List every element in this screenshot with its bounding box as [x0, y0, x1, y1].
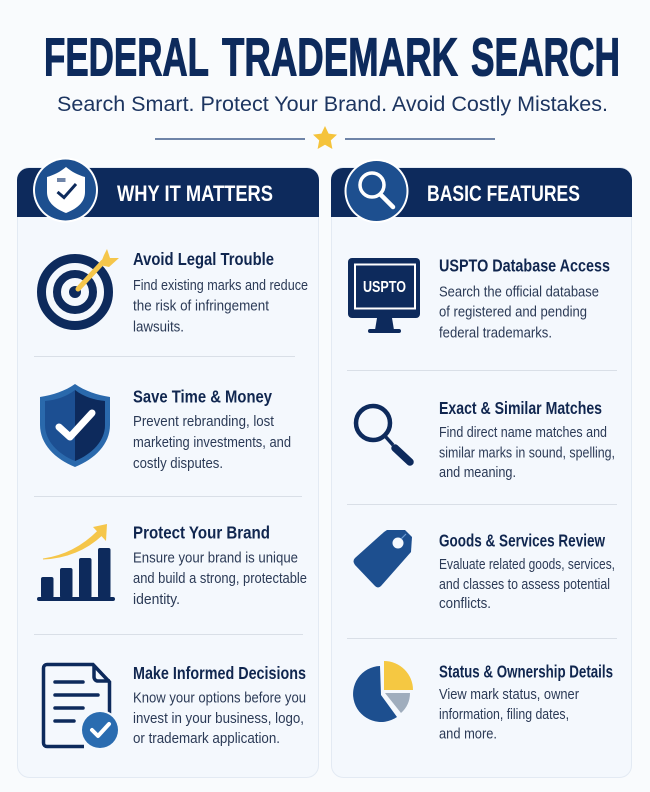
title: FEDERAL: [44, 28, 209, 88]
item: save time and money: [40, 384, 291, 472]
description: Search the official database: [439, 284, 599, 300]
description: and meaning.: [439, 464, 516, 481]
heading: Save Time & Money: [133, 386, 272, 406]
item: status and ownership details: [353, 661, 613, 742]
heading: Avoid Legal Trouble: [133, 249, 274, 269]
icon: monitor: USPTO: [363, 279, 406, 296]
description: [439, 284, 599, 342]
description: information, filing dates,: [439, 706, 569, 723]
icon: pie chart: [353, 661, 413, 722]
description: and classes to assess potential: [439, 576, 610, 593]
item: uspto database access: [348, 256, 610, 342]
description: Know your options before you: [133, 690, 306, 706]
item: make informed decisions: [44, 663, 306, 750]
title: [44, 28, 620, 88]
description: and more.: [439, 726, 497, 742]
description: [133, 413, 291, 472]
icon: rising bar chart: [37, 524, 115, 601]
icon: monitor: [348, 258, 420, 333]
heading: Exact & Similar Matches: [439, 398, 602, 418]
heading: Goods & Services Review: [439, 530, 605, 550]
description: [133, 550, 307, 608]
subtitle: Search Smart. Protect Your Brand. Avoid Costly Mistakes.: [57, 93, 608, 116]
description: Find existing marks and reduce: [133, 277, 308, 294]
description: conflicts.: [439, 595, 491, 612]
description: of registered and pending: [439, 304, 587, 320]
description: [439, 424, 615, 481]
description: similar marks in sound, spelling,: [439, 444, 615, 462]
heading: USPTO Database Access: [439, 256, 610, 276]
description: or trademark application.: [133, 730, 280, 747]
icon: magnifying glass: [356, 406, 410, 462]
title: TRADEMARK: [222, 28, 458, 88]
divider with star: [155, 126, 495, 149]
heading badge: magnifier: [344, 159, 408, 223]
description: Prevent rebranding, lost: [133, 413, 275, 430]
description: [439, 556, 615, 612]
icon: price tag: [354, 530, 412, 588]
panel heading: WHY IT MATTERS: [117, 181, 273, 206]
description: lawsuits.: [133, 318, 184, 336]
icon: target with arrow: [42, 249, 119, 326]
heading: Protect Your Brand: [133, 522, 270, 542]
panel: why it matters: [17, 158, 319, 778]
description: and build a strong, protectable: [133, 570, 307, 587]
heading: Make Informed Decisions: [133, 663, 306, 683]
description: federal trademarks.: [439, 324, 552, 342]
icon: shield with check: [40, 384, 110, 467]
item: protect your brand: [37, 522, 307, 608]
description: View mark status, owner: [439, 686, 579, 703]
description: [133, 277, 308, 336]
heading badge: shield: [33, 158, 98, 222]
item: exact and similar matches: [356, 398, 615, 481]
description: invest in your business, logo,: [133, 710, 304, 727]
description: Ensure your brand is unique: [133, 550, 298, 566]
item: goods and services review: [354, 530, 615, 612]
description: costly disputes.: [133, 455, 223, 472]
panel heading: BASIC FEATURES: [427, 181, 580, 206]
description: identity.: [133, 591, 180, 608]
description: Find direct name matches and: [439, 424, 607, 441]
panel: basic features: [331, 159, 632, 778]
icon: document with check: [44, 664, 120, 750]
description: [133, 690, 306, 747]
item: avoid legal trouble: [42, 249, 308, 336]
description: the risk of infringement: [133, 298, 270, 314]
description: marketing investments, and: [133, 434, 291, 451]
description: [439, 686, 579, 742]
